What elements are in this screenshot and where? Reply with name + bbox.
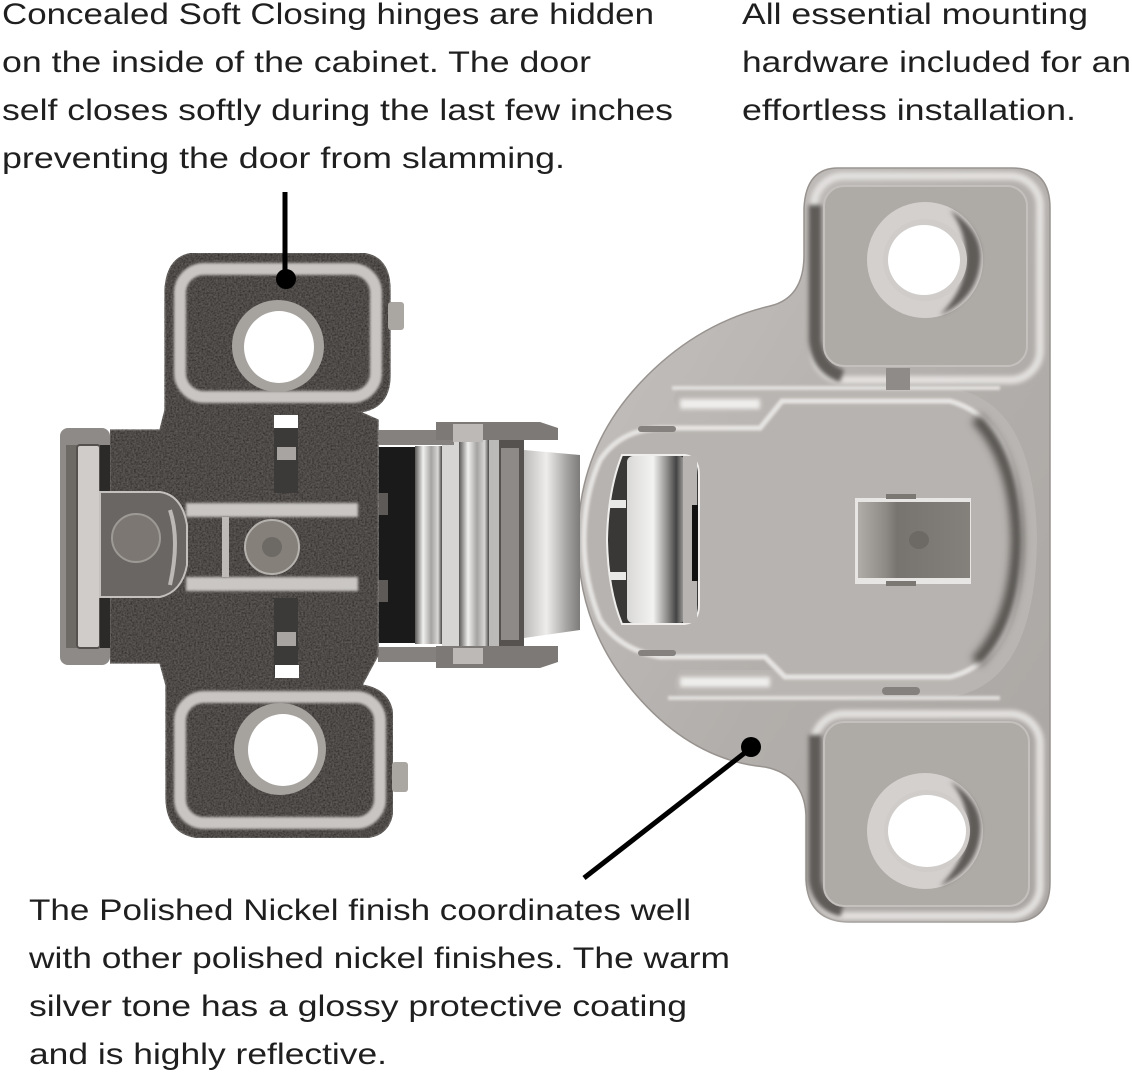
text: mounting hardware: hardware included for an	[742, 46, 1131, 79]
raised cup housing	[584, 401, 1020, 677]
callout line: nickel finish	[584, 737, 761, 878]
cup opening with cylinder	[607, 455, 699, 624]
plate with dome	[578, 168, 1050, 922]
rectangular spring window	[855, 494, 971, 586]
text: mounting hardware: effortless installation.	[742, 94, 1076, 127]
curved shadow right side of housing	[976, 418, 1017, 662]
icon: hinge cup plate	[578, 168, 1050, 922]
bottom screw hole	[867, 773, 983, 889]
bottom pad ridge	[814, 714, 1040, 916]
text: concealed soft closing hinges: self closes softly during the last few inches	[2, 94, 673, 127]
text: concealed soft closing hinges: preventing the door from slamming.	[2, 142, 565, 175]
slots	[274, 415, 298, 493]
callout line: soft closing	[276, 192, 296, 289]
plate body	[110, 253, 393, 838]
top screw hole	[867, 202, 983, 318]
center latch	[100, 492, 187, 597]
left end bracket	[60, 428, 110, 665]
top raised rim	[180, 269, 376, 397]
side tabs	[388, 302, 404, 330]
top pad ridge	[814, 176, 1040, 380]
top hole	[232, 300, 324, 392]
side ridge highlights	[680, 404, 770, 682]
text: polished nickel finish	[28, 894, 730, 1071]
text: polished nickel finish: and is highly reflective.	[29, 1038, 387, 1071]
text: polished nickel finish: silver tone has a glossy protective coating	[29, 990, 687, 1023]
text: concealed soft closing hinges: on the inside of the cabinet. The door	[2, 46, 591, 79]
outer flange of cup	[674, 388, 1037, 697]
bottom raised rim	[180, 697, 380, 823]
icon: mounting plate	[60, 253, 408, 838]
rivets	[638, 426, 676, 432]
text: polished nickel finish: with other polished nickel finishes. The warm	[28, 942, 730, 975]
text: polished nickel finish: The Polished Nickel finish coordinates well	[29, 894, 691, 927]
icon: hinge arm	[366, 422, 580, 668]
text: concealed soft closing hinges	[2, 0, 673, 175]
text: mounting hardware	[742, 0, 1131, 127]
bottom hole	[234, 703, 326, 795]
center cross bars	[186, 503, 358, 517]
